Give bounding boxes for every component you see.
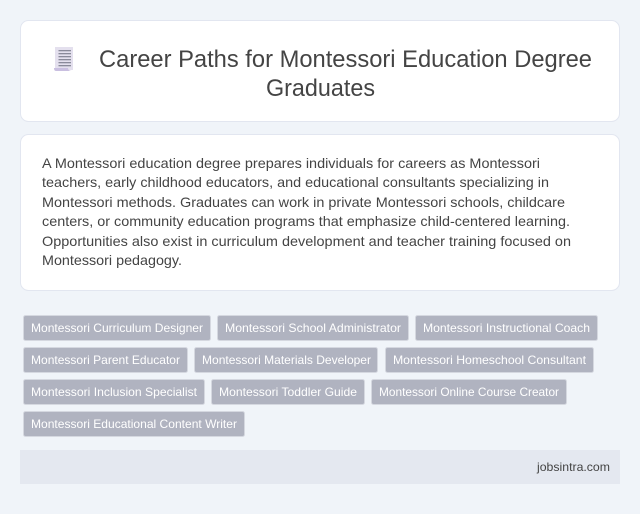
tag: Montessori Instructional Coach: Montessori Instructional Coach (423, 321, 590, 335)
tag: Montessori Online Course Creator (372, 380, 566, 404)
tag: Montessori Homeschool Consultant: Montessori Homeschool Consultant (393, 353, 587, 367)
description text: teachers, early childhood educators, and educational consultants specializing in (42, 174, 549, 190)
panel: header card (20, 20, 620, 122)
tag: Montessori Inclusion Specialist: Montessori Inclusion Specialist (31, 385, 198, 399)
tag: Montessori Homeschool Consultant (386, 348, 594, 372)
panel: description card (20, 134, 620, 290)
footer source text: jobsintra.com (536, 460, 610, 474)
tag: Montessori Materials Developer (194, 348, 378, 372)
footer bar (20, 450, 620, 484)
description text: Montessori pedagogy. (42, 252, 182, 268)
tag: Montessori Educational Content Writer (24, 412, 244, 436)
icon: document scroll (54, 47, 73, 71)
tag: Montessori Curriculum Designer: Montessori Curriculum Designer (31, 321, 203, 335)
description text: Opportunities also exist in curriculum development and teacher training focused on (42, 233, 571, 249)
tag: Montessori Educational Content Writer: Montessori Educational Content Writer (31, 417, 237, 431)
title: Career Paths for Montessori Education Degree (99, 46, 592, 73)
description text: centers, or community education programs that emphasize child-centered learning. (42, 213, 570, 229)
tag: Montessori Parent Educator: Montessori Parent Educator (31, 353, 180, 367)
description text: Montessori methods. Graduates can work in private Montessori schools, childcare (42, 194, 565, 210)
tag: Montessori Curriculum Designer (24, 316, 210, 340)
title: Graduates (266, 75, 375, 102)
description text: A Montessori education degree prepares individuals for careers as Montessori (42, 155, 540, 171)
tag: Montessori Toddler Guide: Montessori Toddler Guide (219, 385, 357, 399)
tag: Montessori Instructional Coach (416, 316, 598, 340)
tag: Montessori Inclusion Specialist (24, 380, 204, 404)
tag: Montessori Toddler Guide (212, 380, 364, 404)
tag list (24, 316, 598, 436)
tag: Montessori Online Course Creator: Montessori Online Course Creator (379, 385, 559, 399)
tag: Montessori Parent Educator (24, 348, 188, 372)
tag: Montessori School Administrator (218, 316, 408, 340)
tag: Montessori Materials Developer: Montessori Materials Developer (202, 353, 371, 367)
tag: Montessori School Administrator: Montessori School Administrator (225, 321, 401, 335)
